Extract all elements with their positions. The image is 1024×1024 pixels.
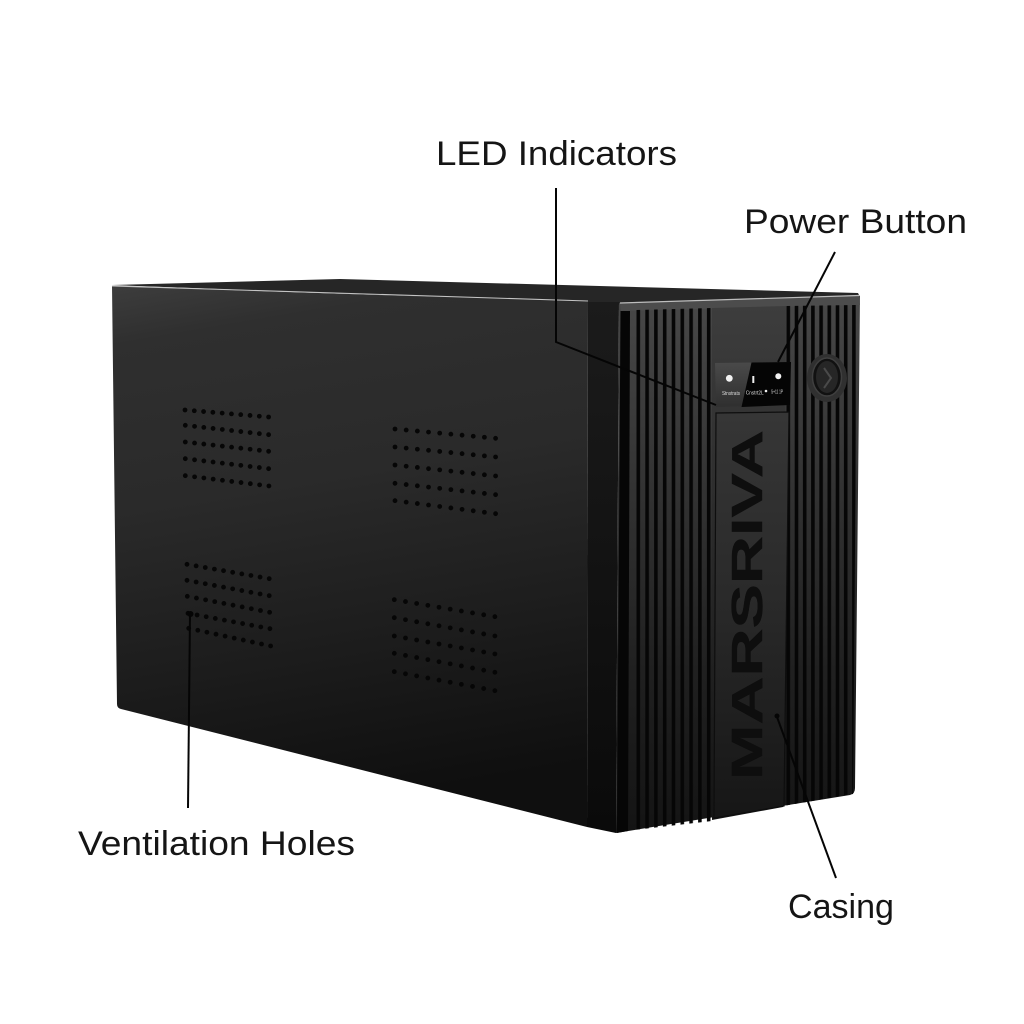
label: LED Indicators: LED Indicators [436,135,677,173]
top face [112,279,860,303]
LED: small [765,390,767,392]
left ribs [634,308,712,830]
front corner strip [587,302,619,833]
LED: right [775,373,781,379]
LED indicator panel [715,362,791,407]
ventilation holes: upper left [185,410,269,486]
arrow: Power Button leader [778,252,835,362]
LED: status [726,375,733,382]
label: Power Button: Power Button [744,203,967,241]
LED caption: S+11 1P [771,390,783,396]
arrow: LED Indicators leader [556,188,716,405]
center panel [712,306,786,820]
logo text: MARSRIVA [723,430,772,780]
label: Ventilation Holes: Ventilation Holes [78,825,355,863]
LED caption: Cnstrt2L [746,390,764,396]
ventilation holes: upper right [395,429,496,514]
top edge highlight [620,295,860,311]
power button [807,354,847,402]
panel: UPS unit [112,279,860,833]
side panel [112,286,588,827]
ventilation holes: lower left [187,564,271,646]
label: Casing: Casing [788,888,894,926]
logo panel [714,412,789,818]
arrow: Casing leader [774,714,836,878]
LED: middle [752,376,754,383]
arrow: Ventilation Holes leader [188,611,194,808]
ventilation holes: lower right [394,600,495,691]
front face [616,296,860,833]
right ribs [783,305,857,806]
LED caption: Stnstrats [722,391,740,397]
